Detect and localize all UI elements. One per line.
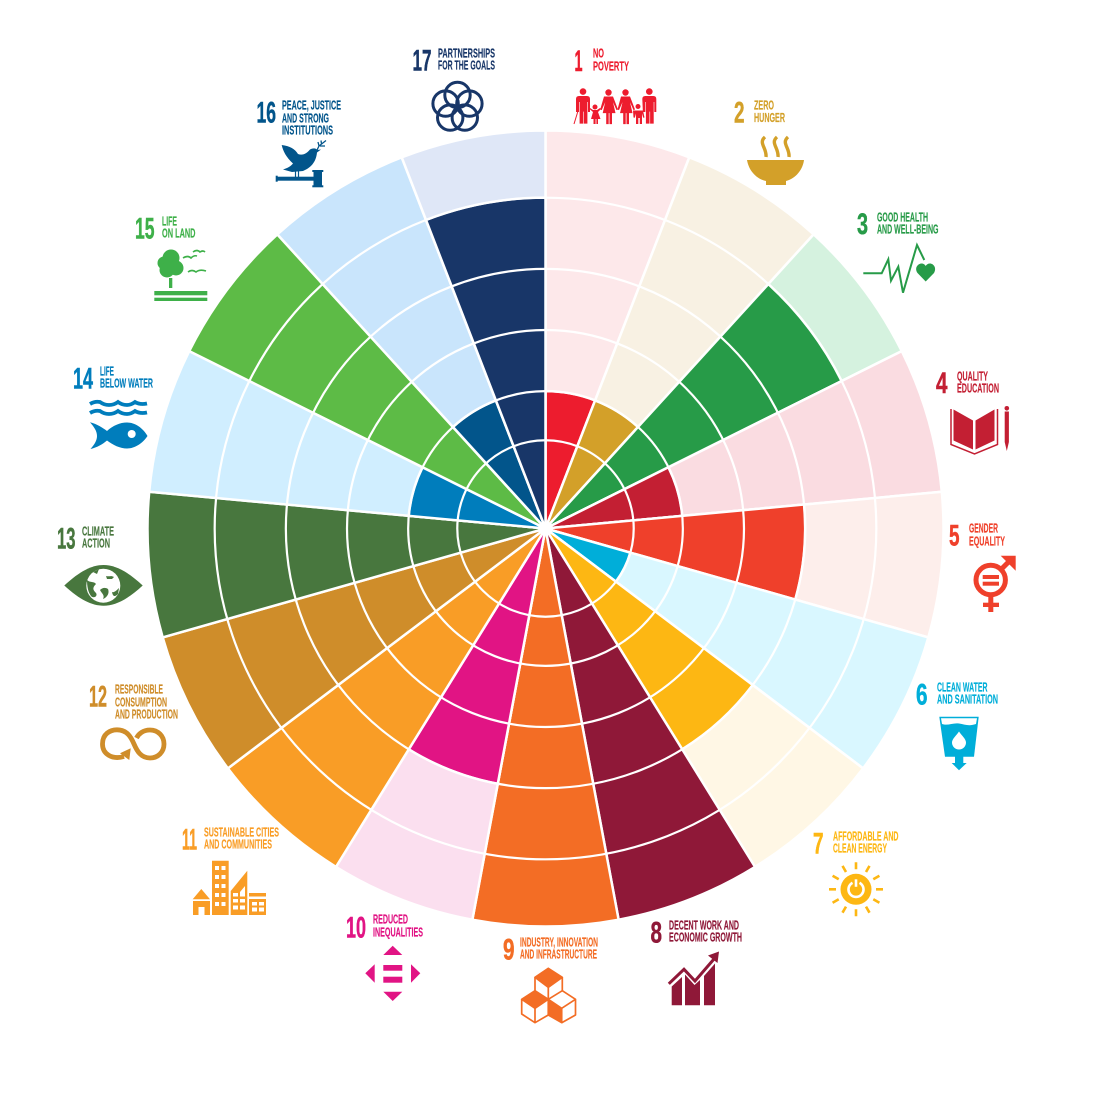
icon: book and pencil (951, 406, 1009, 454)
goal 8 (650, 916, 742, 1005)
goal 4 (936, 367, 1009, 454)
goal 11 label: 11 (182, 824, 197, 856)
goal 13 label: ACTION (82, 536, 110, 550)
icon: bowl (747, 137, 804, 185)
icon: city buildings (193, 861, 266, 915)
goal 16 label: AND STRONG (282, 111, 329, 125)
goal 1 label (574, 45, 629, 78)
goal 2 (734, 96, 804, 185)
goal 16 label: 16 (256, 96, 276, 130)
goal 14 label (73, 362, 153, 396)
sector 12: responsible consumption (141, 414, 546, 768)
sector 10: reduced inequalities (331, 502, 546, 920)
goal 10 label: 10 (346, 912, 366, 944)
goal 12 label: RESPONSIBLE (115, 682, 163, 696)
goal 13 label: CLIMATE (82, 524, 114, 538)
sector 1: no poverty (546, 131, 689, 528)
goal 2 label: 2 (734, 96, 744, 130)
goal 16 label (256, 96, 341, 137)
sector 4: quality education (546, 351, 966, 657)
goal 11 label: AND COMMUNITIES (204, 837, 272, 851)
goal 12 label: AND PRODUCTION (115, 707, 178, 721)
goal 16 label: INSTITUTIONS (282, 123, 333, 137)
goal 9 label (503, 934, 598, 966)
goal 9 (503, 934, 598, 1023)
goal 15 label: ON LAND (162, 226, 196, 240)
icon: family (574, 88, 656, 124)
goal 7 (813, 828, 898, 916)
goal 7 label: AFFORDABLE AND (833, 829, 898, 843)
sector 6: clean water (506, 528, 928, 776)
goal 12 (89, 680, 178, 760)
goal 3 label: GOOD HEALTH (877, 210, 928, 224)
goal 8 label: 8 (650, 916, 662, 950)
goal 13 label: 13 (57, 522, 76, 556)
goal 10 label (346, 912, 423, 944)
goal 5 label: GENDER (969, 521, 998, 535)
sector 5: gender equality (546, 492, 955, 672)
goal 9 label: 9 (503, 934, 514, 966)
icon: eye with globe (64, 565, 143, 606)
sector 3: good health (546, 234, 920, 625)
goal 2 label: ZERO (754, 98, 774, 112)
goal 7 label (813, 828, 898, 860)
goal 15 (135, 212, 207, 301)
goal 8 label: ECONOMIC GROWTH (669, 930, 742, 944)
goal 14 label: 14 (73, 362, 93, 396)
goal 9 label: INDUSTRY, INNOVATION (520, 935, 598, 949)
icon: infinity loop (102, 730, 164, 760)
goal 13 (57, 522, 143, 606)
icon: water cup (939, 717, 979, 770)
goal 10 label: REDUCED (373, 912, 408, 926)
goal 6 (916, 678, 998, 770)
goal 3 (857, 208, 939, 293)
goal 15 label (135, 212, 196, 246)
goal 17 (412, 44, 495, 130)
goal 17 label: 17 (412, 44, 432, 78)
goal 4 label: QUALITY (957, 369, 988, 383)
goal 10 (346, 912, 423, 1001)
sector 15: life on land (189, 222, 610, 529)
icon: dove and gavel (276, 140, 326, 187)
goal 11 label (182, 824, 279, 856)
icon: arrows and equals (365, 946, 420, 1001)
sector 7: clean energy (459, 528, 863, 883)
sector 9: industry (404, 528, 619, 946)
goal 15 label: 15 (135, 212, 154, 246)
goal 6 label: AND SANITATION (937, 692, 998, 706)
goal 14 label: BELOW WATER (100, 376, 153, 390)
goal 8 label (650, 916, 742, 950)
icon: growth chart (669, 952, 719, 1005)
sector 13: climate action (123, 390, 546, 637)
icon: fish and waves (90, 402, 148, 449)
sector 14: life below water (149, 349, 559, 528)
goal 12 label: CONSUMPTION (115, 695, 167, 709)
goal 2 label (734, 96, 785, 130)
goal 3 label: AND WELL-BEING (877, 222, 939, 236)
goal 1 label: POVERTY (593, 59, 629, 73)
goal 2 label: HUNGER (754, 111, 785, 125)
goal 5 (949, 520, 1016, 612)
goal 12 label: 12 (89, 680, 107, 714)
goal 1 (574, 45, 656, 124)
goal 16 (256, 96, 341, 187)
goal 5 label (949, 520, 1005, 552)
sector 16: peace and justice (277, 138, 652, 528)
goal 12 label (89, 680, 178, 721)
sector 2: zero hunger (546, 157, 823, 580)
icon: gender equality symbol (976, 556, 1016, 612)
goal 7 label: CLEAN ENERGY (833, 841, 887, 855)
goal 8 label: DECENT WORK AND (669, 918, 739, 932)
goal 1 label: 1 (574, 45, 582, 78)
goal 15 label: LIFE (162, 214, 177, 228)
goal 17 label: FOR THE GOALS (438, 58, 495, 72)
sector 11: sustainable cities (214, 453, 546, 867)
goal 6 label: 6 (916, 678, 928, 712)
goal 14 label: LIFE (100, 364, 114, 378)
goal 3 label: 3 (857, 208, 868, 241)
sector 8: decent work (423, 528, 755, 943)
wheel chart (123, 105, 966, 946)
goal 1 label: NO (593, 46, 604, 60)
sector 17: partnerships (402, 105, 680, 529)
goal 11 label: SUSTAINABLE CITIES (204, 825, 279, 839)
icon: stacked cubes (522, 968, 576, 1023)
icon: heartbeat (863, 245, 935, 293)
goal 14 (73, 362, 153, 449)
goal 6 label (916, 678, 998, 712)
icon: tree and birds (154, 250, 207, 301)
goal 13 label (57, 522, 114, 556)
goal 5 label: EQUALITY (969, 534, 1005, 548)
goal 7 label: 7 (813, 828, 824, 860)
goal 6 label: CLEAN WATER (937, 680, 988, 694)
goal 4 label (936, 367, 999, 400)
goal 4 label: EDUCATION (957, 381, 999, 395)
goal 9 label: AND INFRASTRUCTURE (520, 947, 597, 961)
goal 16 label: PEACE, JUSTICE (282, 98, 341, 112)
goal 5 label: 5 (949, 520, 960, 552)
goal 11 (182, 824, 279, 915)
icon: sun with power button (829, 862, 883, 916)
goal 17 label (412, 44, 495, 78)
goal 10 label: INEQUALITIES (373, 925, 423, 939)
goal 17 label: PARTNERSHIPS (438, 46, 495, 60)
goal 3 label (857, 208, 939, 241)
goal 4 label: 4 (936, 367, 948, 400)
icon: five interlocked rings (433, 82, 482, 130)
